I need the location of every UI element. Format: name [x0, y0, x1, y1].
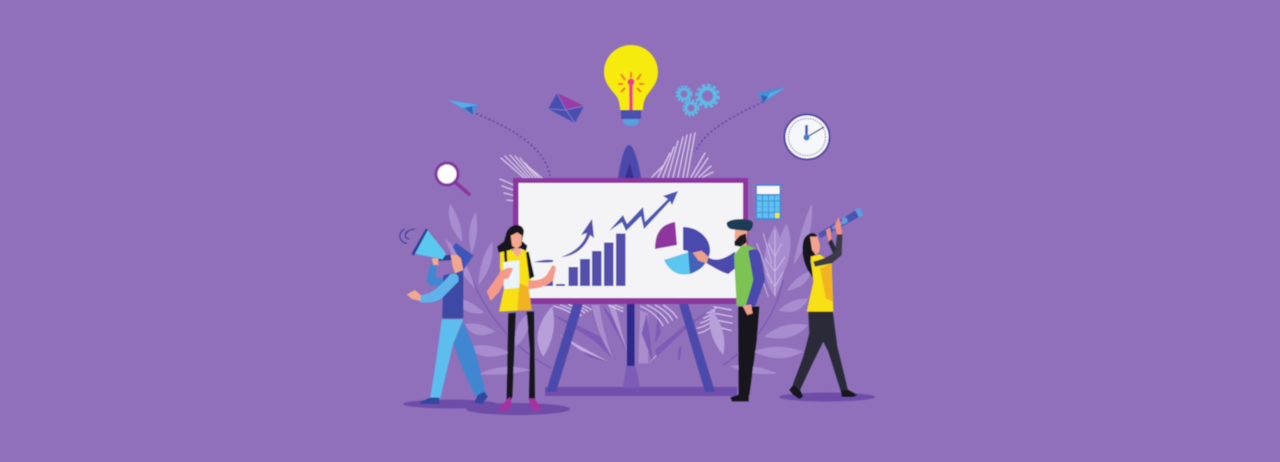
shadow: ground under woman with telescope [779, 392, 875, 402]
plant: fronds under the board [550, 305, 733, 364]
pie chart [655, 222, 710, 274]
figure: man pointing at chart [693, 219, 765, 401]
plant: top left palm behind board [500, 155, 542, 201]
icon: magnifying glass [436, 163, 470, 195]
icon: gears [676, 85, 718, 116]
plant: top right palm behind board [652, 133, 713, 177]
shadow: ground under woman with paper [466, 403, 570, 415]
shadow: easel base [545, 387, 737, 396]
icon: light bulb [604, 45, 658, 126]
panel: presentation board [513, 178, 748, 304]
icon: calculator [756, 184, 781, 220]
plant: left leafy branch [445, 203, 554, 375]
shadow: ground under man with megaphone [403, 400, 497, 408]
easel [546, 145, 715, 392]
icon: right paper plane [757, 87, 786, 103]
arrow: curved growth arrow [561, 219, 594, 257]
figure: man with megaphone [400, 228, 488, 404]
arrow: zigzag trend arrow [609, 191, 678, 231]
dotted flight path: left [472, 112, 550, 176]
figure: woman with telescope [789, 208, 863, 399]
dotted flight path: right [695, 102, 763, 152]
icon: clock [784, 114, 830, 160]
figure: woman holding paper [487, 225, 556, 412]
icon: left paper plane [448, 100, 478, 115]
icon: envelope [548, 93, 584, 123]
plant: right leafy branch [709, 203, 812, 374]
bar chart [534, 234, 626, 286]
